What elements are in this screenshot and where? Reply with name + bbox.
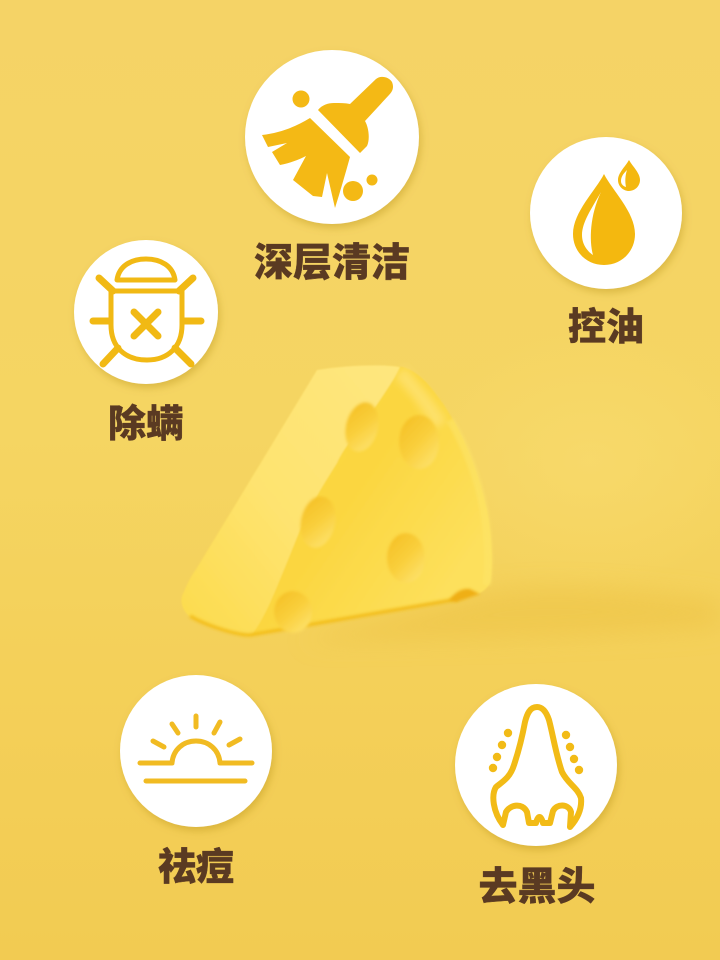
cheese top face bbox=[182, 365, 400, 636]
cheese body bbox=[182, 365, 492, 636]
cheese holes bbox=[274, 399, 480, 633]
floor shadow bbox=[300, 588, 720, 642]
label: blackhead removal: 去黑头 bbox=[478, 866, 596, 909]
cheese soap bbox=[182, 365, 492, 636]
icon: oil drops bbox=[573, 160, 640, 265]
panel: acne removal bbox=[120, 675, 272, 889]
icon: mite bbox=[93, 259, 201, 364]
circle: oil badge bbox=[530, 137, 682, 289]
panel: oil control bbox=[530, 137, 682, 349]
label: deep cleansing: 深层清洁 bbox=[254, 242, 410, 285]
label: mite removal: 除螨 bbox=[108, 403, 184, 446]
circle: nose badge bbox=[455, 684, 617, 846]
panel: deep cleansing bbox=[245, 50, 419, 285]
icon: broom bbox=[262, 77, 393, 208]
cheese right rim highlight bbox=[450, 420, 488, 585]
cheese crest highlight bbox=[400, 372, 440, 425]
label: acne removal: 祛痘 bbox=[158, 847, 234, 889]
label: oil control: 控油 bbox=[568, 307, 644, 349]
circle: mite badge bbox=[74, 240, 218, 384]
panel: mite removal bbox=[74, 240, 218, 446]
cheese bottom edge bbox=[190, 599, 458, 635]
icon: nose bbox=[489, 707, 583, 827]
panel: blackhead removal bbox=[455, 684, 617, 909]
circle: broom badge bbox=[245, 50, 419, 224]
icon: sunrise bbox=[140, 716, 252, 781]
circle: sunrise badge bbox=[120, 675, 272, 827]
